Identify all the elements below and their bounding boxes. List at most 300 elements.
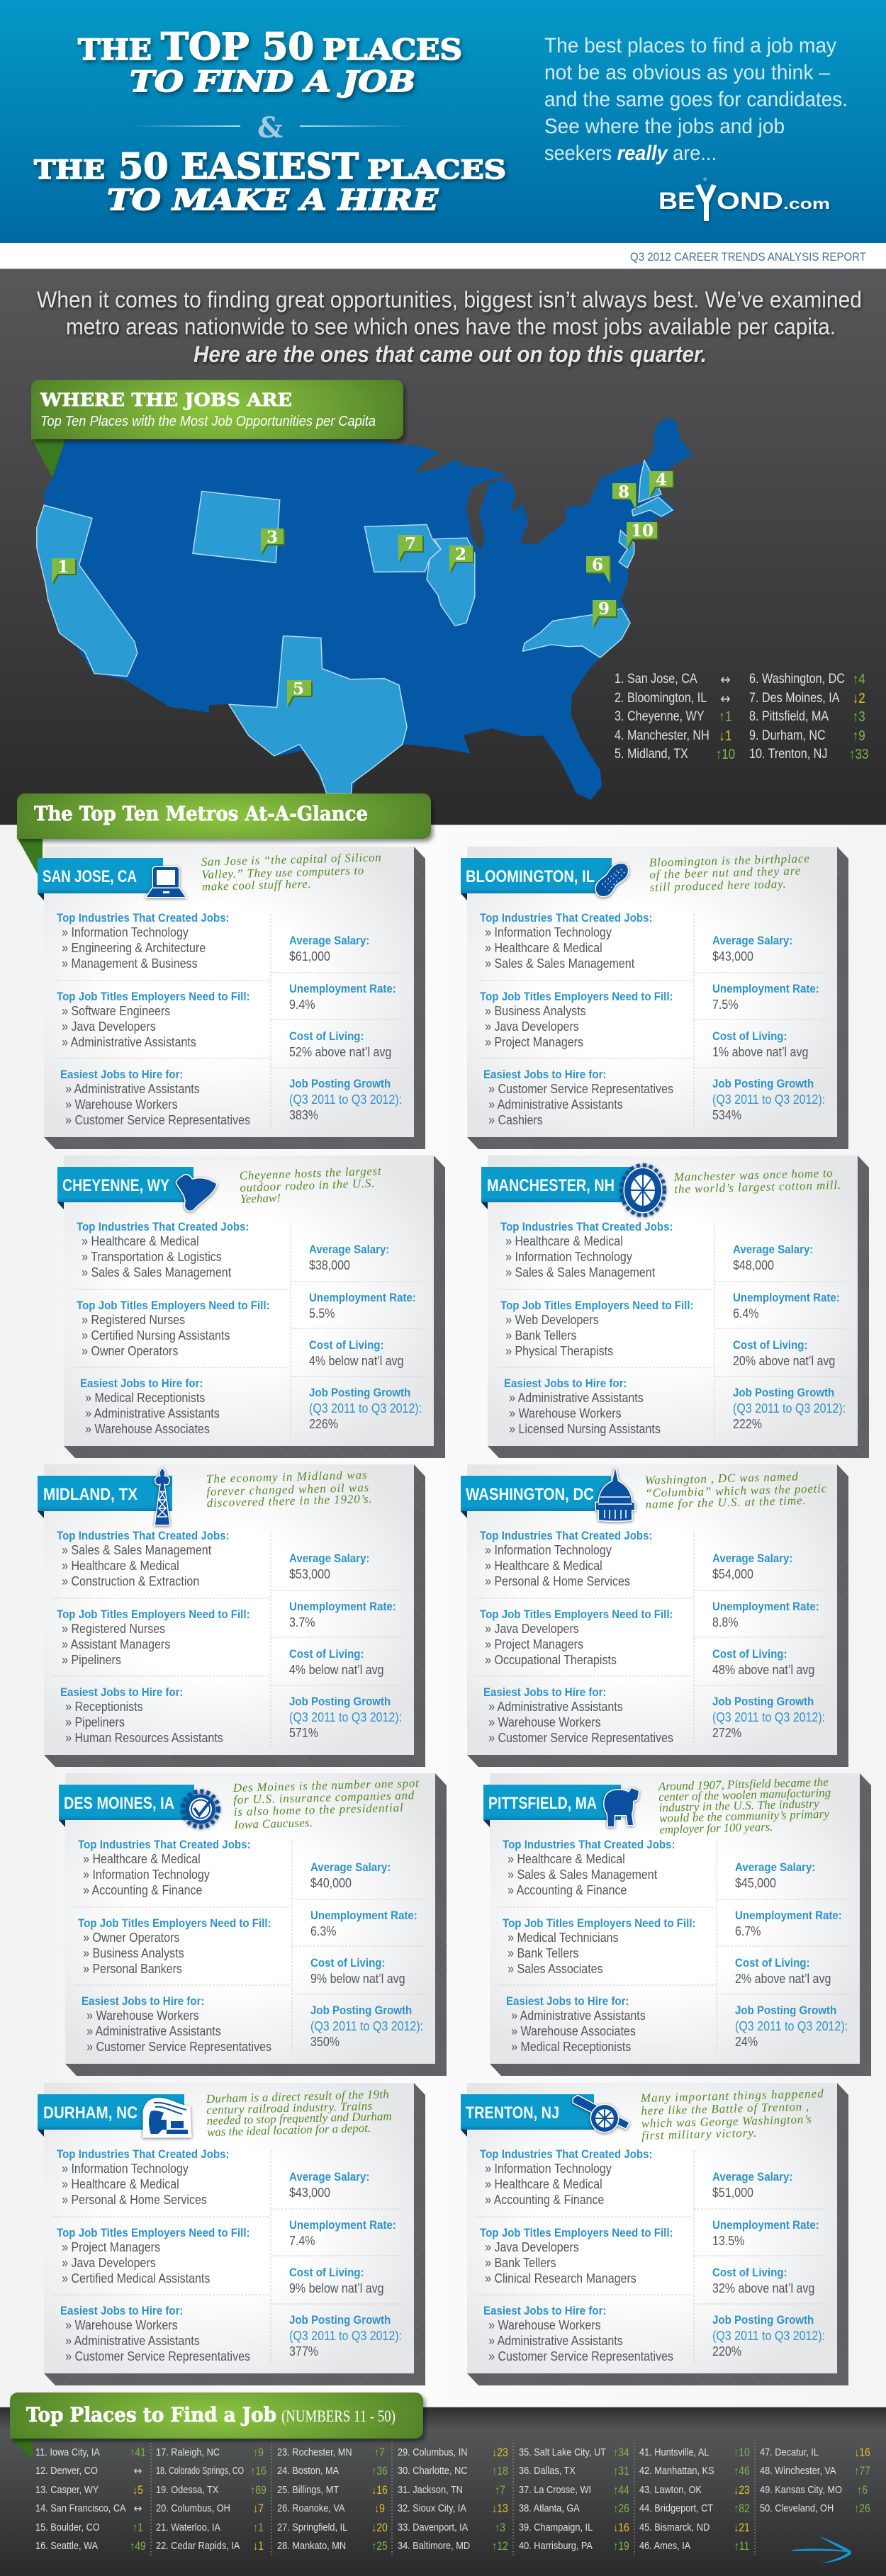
ranking list column 29-34: 32. Sioux City, IA <box>398 2502 466 2514</box>
text: ↓5 <box>133 2484 143 2497</box>
icon: cowboy hat <box>174 1173 220 1214</box>
easiest jobs list: » Customer Service Representatives <box>488 2349 673 2363</box>
unemployment stat <box>289 2218 410 2249</box>
cost of living stat: Cost of Living: <box>733 1338 808 1352</box>
text: ↑6 <box>857 2484 868 2497</box>
icon: cannon <box>572 2096 630 2132</box>
easiest jobs list <box>60 1685 243 1746</box>
average salary stat <box>310 1860 401 1891</box>
top industries list: » Sales & Sales Management <box>505 1265 655 1279</box>
cost of living stat <box>712 1646 827 1678</box>
unemployment stat <box>309 1290 430 1321</box>
easiest jobs list: Easiest Jobs to Hire for: <box>60 1685 183 1699</box>
cost of living stat: 48% above nat’l avg <box>712 1663 814 1677</box>
pin 3: 3 <box>267 528 278 547</box>
title: top 50 places and 50 easiest places: PLACES <box>323 33 462 67</box>
job growth stat <box>712 1694 839 1741</box>
top job titles list: » Sales Associates <box>508 1962 603 1976</box>
icon: check badge <box>181 1789 220 1829</box>
fun fact note: Cheyenne hosts the largest <box>239 1164 382 1182</box>
easiest jobs list: » Warehouse Workers <box>65 2318 178 2332</box>
icon: gear wheel <box>619 1164 664 1216</box>
top job titles list: » Certified Medical Assistants <box>62 2271 210 2286</box>
cost of living stat: Cost of Living: <box>735 1956 810 1970</box>
ranking list column 29-34: 33. Davenport, IA <box>398 2521 468 2533</box>
easiest jobs list: » Receptionists <box>65 1700 143 1714</box>
easiest jobs list: » Administrative Assistants <box>511 2009 646 2023</box>
fun fact note: the world’s largest cotton mill. <box>674 1178 841 1196</box>
average salary stat: $45,000 <box>735 1876 776 1890</box>
top job titles list: Top Job Titles Employers Need to Fill: <box>480 2226 673 2239</box>
map ranking legend, right column: 8. Pittsfield, MA <box>749 709 829 724</box>
average salary stat: Average Salary: <box>309 1243 389 1256</box>
job growth stat <box>289 2312 416 2359</box>
ampersand divider: & <box>257 111 283 145</box>
top industries list: Top Industries That Created Jobs: <box>57 1529 230 1542</box>
text: ↑26 <box>613 2502 629 2515</box>
text: ↑36 <box>371 2465 388 2478</box>
top industries list: » Healthcare & Medical <box>485 2177 602 2191</box>
cost of living stat: 4% below nat’l avg <box>289 1663 384 1677</box>
top job titles list <box>57 2226 274 2286</box>
top job titles list: » Bank Tellers <box>508 1946 578 1960</box>
easiest jobs list: » Warehouse Workers <box>488 1715 601 1729</box>
arrow: continue swoosh <box>790 2533 854 2568</box>
city ribbon <box>481 1167 633 1202</box>
panel: Des Moines card <box>65 1773 435 2064</box>
job growth stat: Job Posting Growth <box>712 1695 814 1708</box>
top industries list: » Information Technology <box>83 1868 210 1882</box>
ranking list column 47-50 <box>760 2444 842 2519</box>
average salary stat: Average Salary: <box>735 1860 815 1874</box>
ranking list column 35-40: 39. Champaign, IL <box>519 2521 593 2533</box>
text: ↑10 <box>734 2446 750 2459</box>
top job titles list: » Java Developers <box>485 1019 579 1034</box>
job growth stat: Job Posting Growth <box>309 1386 410 1399</box>
average salary stat <box>712 934 792 964</box>
top industries list <box>57 911 230 971</box>
fun fact note: Around 1907, Pittsfield became the <box>658 1775 829 1793</box>
job growth stat: Job Posting Growth <box>289 1695 391 1708</box>
cost of living stat: 4% below nat’l avg <box>309 1354 404 1368</box>
top industries list: Top Industries That Created Jobs: <box>77 1220 249 1233</box>
top industries list <box>77 1220 249 1279</box>
map ranking legend, left column: 3. Cheyenne, WY <box>615 709 705 724</box>
fun fact note: Durham is a direct result of the 19th <box>206 2087 389 2106</box>
easiest jobs list: » Customer Service Representatives <box>488 1731 673 1745</box>
top industries list: Top Industries That Created Jobs: <box>500 1220 673 1233</box>
panel: Washington card <box>467 1464 837 1755</box>
easiest jobs list: Easiest Jobs to Hire for: <box>483 1685 606 1699</box>
top industries list: » Sales & Sales Management <box>508 1868 657 1882</box>
ranking list column 17-22: ↑9 <box>253 2446 264 2459</box>
easiest jobs list: Easiest Jobs to Hire for: <box>82 1994 204 2008</box>
text: ↑11 <box>734 2540 749 2553</box>
column separators <box>0 2443 886 2556</box>
ranking list column 17-22: 19. Odessa, TX <box>156 2484 218 2496</box>
state: Iowa <box>364 524 441 572</box>
top industries list: » Accounting & Finance <box>508 1883 627 1897</box>
easiest jobs list: » Pipeliners <box>65 1715 125 1729</box>
top job titles list: Top Job Titles Employers Need to Fill: <box>57 2226 250 2239</box>
fun fact note <box>490 1773 860 1844</box>
top job titles list: » Registered Nurses <box>82 1313 185 1327</box>
top job titles list: » Bank Tellers <box>485 2256 556 2270</box>
city ribbon: CHEYENNE, WY <box>62 1176 169 1195</box>
fun fact note <box>65 1773 435 1844</box>
easiest jobs list: » Customer Service Representatives <box>488 1082 673 1096</box>
ranking list column 17-22: ↑1 <box>253 2521 264 2534</box>
fun fact note: outdoor rodeo in the U.S. <box>240 1176 375 1194</box>
text: ↑44 <box>613 2484 629 2497</box>
logo: Beyond.com: .com <box>783 196 830 213</box>
easiest jobs list: » Warehouse Workers <box>86 2009 199 2023</box>
average salary stat: $54,000 <box>712 1567 753 1581</box>
ranking list column 11-16: 14. San Francisco, CA <box>35 2502 126 2514</box>
icon: peanut <box>593 862 631 900</box>
top job titles list: » Java Developers <box>485 1622 579 1636</box>
cost of living stat: 1% above nat’l avg <box>712 1045 808 1059</box>
easiest jobs list: » Customer Service Representatives <box>86 2040 271 2054</box>
easiest jobs list: Easiest Jobs to Hire for: <box>80 1377 203 1390</box>
unemployment stat <box>712 2218 833 2249</box>
fun fact note: discovered there in the 1920’s. <box>206 1492 372 1510</box>
average salary stat <box>712 1551 803 1582</box>
ranking list column 29-34 <box>398 2444 470 2555</box>
pin 1: 1 <box>57 558 69 577</box>
top industries list <box>78 1838 273 1898</box>
fun fact note: was the ideal location for a depot. <box>207 2121 371 2139</box>
top industries list: » Personal & Home Services <box>62 2193 207 2207</box>
fun fact note <box>239 1164 382 1206</box>
ranking list column 41-46: 44. Bridgeport, CT <box>639 2502 713 2514</box>
top job titles list: » Assistant Managers <box>62 1637 170 1651</box>
top job titles list <box>57 1608 274 1668</box>
ranking list column 47-50: 49. Kansas City, MO <box>760 2484 842 2496</box>
US outline <box>37 418 693 800</box>
top job titles list: » Pipeliners <box>62 1653 121 1667</box>
lead paragraph: See where the jobs and job <box>544 115 785 138</box>
pin 4: 4 <box>656 470 667 490</box>
cost of living stat <box>733 1338 848 1369</box>
ranking list column 35-40 <box>519 2444 606 2555</box>
unemployment stat: Unemployment Rate: <box>289 2218 396 2232</box>
ranking list column 23-28 <box>277 2444 352 2555</box>
easiest jobs list: » Cashiers <box>488 1113 543 1127</box>
top industries list: » Accounting & Finance <box>485 2193 604 2207</box>
fun fact note: would be the community’s primary <box>659 1807 830 1825</box>
city ribbon <box>38 2094 184 2130</box>
job growth stat: (Q3 2011 to Q3 2012): <box>289 2329 402 2343</box>
top job titles list <box>77 1299 270 1358</box>
average salary stat: Average Salary: <box>712 2170 792 2184</box>
city ribbon <box>59 1785 194 1820</box>
panel: Trenton card <box>467 2083 837 2373</box>
pin 9 <box>593 599 616 627</box>
text: ↓2 <box>853 690 865 706</box>
pin 5 <box>287 679 311 706</box>
cost of living stat <box>735 1955 843 1987</box>
average salary stat: $48,000 <box>733 1258 774 1272</box>
state: Wyoming <box>193 491 280 563</box>
map ranking legend, left column: 4. Manchester, NH <box>615 728 710 742</box>
banner fold: where the jobs are <box>32 439 65 478</box>
ranking list column 35-40: 38. Atlanta, GA <box>519 2502 580 2514</box>
text: ↑31 <box>613 2465 629 2478</box>
text: ↑4 <box>853 672 865 687</box>
fun fact note: industry in the U.S. The industry <box>658 1797 819 1814</box>
pin 6 <box>586 555 610 583</box>
cost of living stat: Cost of Living: <box>712 1029 787 1043</box>
average salary stat: Average Salary: <box>289 934 369 947</box>
fun fact note: Yeehaw! <box>240 1191 281 1206</box>
panel: Pittsfield card <box>490 1773 860 2064</box>
ranking list column 41-46: 42. Manhattan, KS <box>639 2465 714 2477</box>
city ribbon <box>461 858 612 893</box>
fun fact note <box>488 1156 858 1226</box>
title: top 50 places and 50 easiest places: THE <box>34 155 105 185</box>
unemployment stat: Unemployment Rate: <box>733 1291 840 1304</box>
top industries list: » Personal & Home Services <box>485 1574 630 1588</box>
average salary stat: $53,000 <box>289 1567 330 1581</box>
easiest jobs list: » Administrative Assistants <box>488 1097 623 1112</box>
job growth stat: Job Posting Growth <box>310 2004 412 2017</box>
city ribbon: PITTSFIELD, MA <box>488 1794 597 1813</box>
job growth stat <box>733 1385 860 1432</box>
text: ↓13 <box>492 2502 508 2515</box>
title: top 50 places and 50 easiest places <box>34 26 506 217</box>
ranking list column 35-40: 40. Harrisburg, PA <box>519 2540 593 2552</box>
text: ↑77 <box>854 2465 870 2478</box>
text: ↑3 <box>495 2521 505 2534</box>
text: ↑49 <box>130 2540 146 2553</box>
top industries list: » Sales & Sales Management <box>62 1543 211 1557</box>
easiest jobs list <box>82 1994 295 2055</box>
fun fact note: The economy in Midland was <box>206 1468 367 1486</box>
fun fact note <box>201 850 381 893</box>
cost of living stat <box>712 1029 808 1059</box>
title: top 50 places and 50 easiest places: TO FIND A JOB <box>130 65 415 98</box>
job growth stat <box>310 2003 437 2050</box>
map ranking legend, right column: 7. Des Moines, IA <box>749 690 839 706</box>
panel: Durham card <box>44 2083 414 2373</box>
easiest jobs list: » Human Resources Assistants <box>65 1731 223 1745</box>
cost of living stat <box>712 2265 827 2296</box>
pin 2: 2 <box>455 545 466 564</box>
ranking list column 17-22: ↓7 <box>253 2502 264 2515</box>
fun fact note: Many important things happened <box>640 2086 824 2105</box>
cost of living stat: Cost of Living: <box>310 1956 386 1970</box>
job growth stat: (Q3 2011 to Q3 2012): <box>309 1401 422 1416</box>
dark map section <box>0 269 886 825</box>
easiest jobs list: » Administrative Assistants <box>65 1082 200 1096</box>
icon: capitol dome <box>595 1469 636 1524</box>
ranking list column 11-16: 16. Seattle, WA <box>35 2540 98 2552</box>
top job titles list: » Web Developers <box>505 1313 599 1327</box>
fun fact note: century railroad industry. Trains <box>206 2099 373 2117</box>
average salary stat: $40,000 <box>310 1876 352 1890</box>
text: ↔ <box>720 690 731 707</box>
ranking list column 35-40: 37. La Crosse, WI <box>519 2484 591 2496</box>
pin 2 <box>449 545 473 572</box>
fun fact note: first military victory. <box>641 2126 756 2142</box>
text: ↓9 <box>374 2502 385 2515</box>
text: ↓16 <box>854 2446 870 2459</box>
unemployment stat <box>735 1908 856 1939</box>
map ranking legend, left column <box>615 671 735 762</box>
ranking list column 41-46 <box>639 2444 714 2555</box>
cost of living stat: Cost of Living: <box>289 1029 364 1043</box>
text: ↔ <box>720 671 731 688</box>
fun fact note: name for the U.S. at the time. <box>645 1493 806 1511</box>
unemployment stat: 7.5% <box>712 998 739 1012</box>
unemployment stat <box>289 1599 410 1630</box>
text: ↓21 <box>734 2521 750 2534</box>
easiest jobs list: Easiest Jobs to Hire for: <box>60 1068 183 1081</box>
top industries list: » Information Technology <box>62 925 189 939</box>
ranking list column 47-50: 47. Decatur, IL <box>760 2446 819 2458</box>
easiest jobs list: » Warehouse Associates <box>511 2024 636 2038</box>
average salary stat: $43,000 <box>289 2186 330 2200</box>
ranking list column 17-22: 17. Raleigh, NC <box>156 2446 220 2458</box>
top job titles list: » Project Managers <box>485 1035 583 1049</box>
top industries list <box>480 2147 675 2208</box>
top industries list: » Healthcare & Medical <box>62 1559 179 1573</box>
city ribbon: MIDLAND, TX <box>43 1485 138 1504</box>
easiest jobs list <box>60 1068 250 1127</box>
top job titles list: » Java Developers <box>62 1019 156 1034</box>
top industries list: » Healthcare & Medical <box>485 1559 602 1573</box>
banner: where the jobs are: Top Ten Places with the Most Job Opportunities per Capita <box>40 414 376 429</box>
text: ↓23 <box>734 2484 750 2497</box>
ranking list column 47-50: 48. Winchester, VA <box>760 2465 836 2477</box>
logo: Beyond.com <box>658 177 830 221</box>
unemployment stat <box>712 1599 833 1630</box>
fun fact note: is also home to the presidential <box>233 1801 403 1819</box>
city ribbon <box>38 1476 172 1511</box>
ranking list column 23-28: 27. Springfield, IL <box>277 2521 347 2533</box>
map ranking legend, right column: 6. Washington, DC <box>749 672 845 687</box>
cost of living stat: Cost of Living: <box>289 1647 364 1661</box>
easiest jobs list <box>483 1685 697 1746</box>
ranking list column 23-28: 24. Boston, MA <box>277 2465 339 2477</box>
job growth stat: 226% <box>309 1417 338 1431</box>
cost of living stat: Cost of Living: <box>309 1338 384 1352</box>
fun fact note: Manchester was once home to <box>673 1166 833 1184</box>
ranking list column 29-34: 34. Baltimore, MD <box>398 2540 470 2552</box>
ranking list column 23-28: 23. Rochester, MN <box>277 2446 352 2458</box>
unemployment stat <box>733 1290 853 1321</box>
top industries list: » Engineering & Architecture <box>62 941 206 955</box>
easiest jobs list: Easiest Jobs to Hire for: <box>60 2304 183 2317</box>
fun fact note <box>44 2083 414 2154</box>
job growth stat: 377% <box>289 2344 318 2358</box>
easiest jobs list: » Warehouse Workers <box>65 1097 178 1112</box>
average salary stat <box>289 934 369 964</box>
easiest jobs list <box>80 1377 220 1436</box>
easiest jobs list: Easiest Jobs to Hire for: <box>506 1994 629 2008</box>
icon: locomotive <box>142 2097 191 2139</box>
top industries list: » Healthcare & Medical <box>508 1852 625 1866</box>
unemployment stat <box>310 1908 431 1939</box>
unemployment stat: 9.4% <box>289 998 315 1012</box>
job growth stat: 272% <box>712 1726 741 1740</box>
unemployment stat: Unemployment Rate: <box>289 1600 396 1613</box>
top industries list: Top Industries That Created Jobs: <box>480 911 653 925</box>
fun fact note: which was George Washington’s <box>641 2113 812 2130</box>
text: ↑33 <box>849 747 868 762</box>
average salary stat: $51,000 <box>712 2186 753 2200</box>
average salary stat <box>309 1243 389 1272</box>
text: ↑1 <box>133 2521 143 2534</box>
banner: top places to find a job: Top Places to Find a Job <box>26 2403 276 2427</box>
fun fact note <box>467 2083 837 2154</box>
header banner <box>0 0 886 243</box>
pin 7: 7 <box>405 534 416 553</box>
panel: Cheyenne card <box>64 1156 434 1446</box>
text: ↔ <box>134 2502 142 2515</box>
unemployment stat: Unemployment Rate: <box>712 1600 819 1613</box>
ranking list column 17-22: 18. Colorado Springs, CO <box>156 2465 244 2477</box>
banner: where the jobs are <box>31 380 403 439</box>
easiest jobs list: » Administrative Assistants <box>86 2024 221 2038</box>
job growth stat: (Q3 2011 to Q3 2012): <box>310 2019 423 2033</box>
top job titles list <box>480 990 673 1049</box>
cost of living stat <box>289 1646 396 1678</box>
cost of living stat: Cost of Living: <box>712 2266 787 2279</box>
top industries list: » Information Technology <box>485 925 612 939</box>
cost of living stat <box>289 1029 391 1059</box>
cost of living stat: 9% below nat’l avg <box>310 1972 405 1986</box>
job growth stat: Job Posting Growth <box>712 2313 814 2327</box>
state: Texas <box>229 636 407 793</box>
text: ↓1 <box>719 728 731 744</box>
ranking list column 41-46: 45. Bismarck, ND <box>639 2521 710 2533</box>
easiest jobs list: » Customer Service Representatives <box>65 1113 250 1127</box>
pin 8 <box>612 482 636 509</box>
top industries list: » Healthcare & Medical <box>83 1852 201 1866</box>
pin 6: 6 <box>592 555 603 575</box>
cost of living stat <box>289 2265 396 2296</box>
ranking list column 11-16: 15. Boulder, CO <box>35 2521 100 2533</box>
city ribbon: DES MOINES, IA <box>64 1794 174 1813</box>
pin 10: 10 <box>631 521 654 541</box>
ranking list column 11-16: 11. Iowa City, IA <box>35 2446 100 2458</box>
easiest jobs list: » Administrative Assistants <box>509 1391 644 1405</box>
top job titles list: Top Job Titles Employers Need to Fill: <box>78 1916 271 1930</box>
panel: Bloomington card <box>467 847 837 1137</box>
banner: where the jobs are: WHERE THE JOBS ARE <box>40 390 292 410</box>
top job titles list: Top Job Titles Employers Need to Fill: <box>57 1608 250 1621</box>
map ranking legend, right column: 9. Durham, NC <box>749 728 826 742</box>
top industries list: Top Industries That Created Jobs: <box>503 1838 675 1851</box>
job growth stat: (Q3 2011 to Q3 2012): <box>289 1092 402 1107</box>
job growth stat: 534% <box>712 1108 741 1122</box>
lead paragraph <box>544 34 848 165</box>
cost of living stat: Cost of Living: <box>289 2266 364 2279</box>
easiest jobs list <box>483 2304 697 2364</box>
top industries list <box>480 1529 675 1589</box>
top job titles list: » Software Engineers <box>62 1004 170 1018</box>
job growth stat: Job Posting Growth <box>735 2004 836 2017</box>
title: top 50 places and 50 easiest places: TO MAKE A HIRE <box>107 183 439 217</box>
panel: Midland card <box>44 1464 414 1755</box>
job growth stat: (Q3 2011 to Q3 2012): <box>712 2329 825 2343</box>
top job titles list: » Business Analysts <box>83 1946 184 1960</box>
banner: top ten metros at a glance: The Top Ten Metros At-A-Glance <box>34 802 368 825</box>
state: Illinois <box>427 538 475 626</box>
top industries list <box>480 911 653 971</box>
